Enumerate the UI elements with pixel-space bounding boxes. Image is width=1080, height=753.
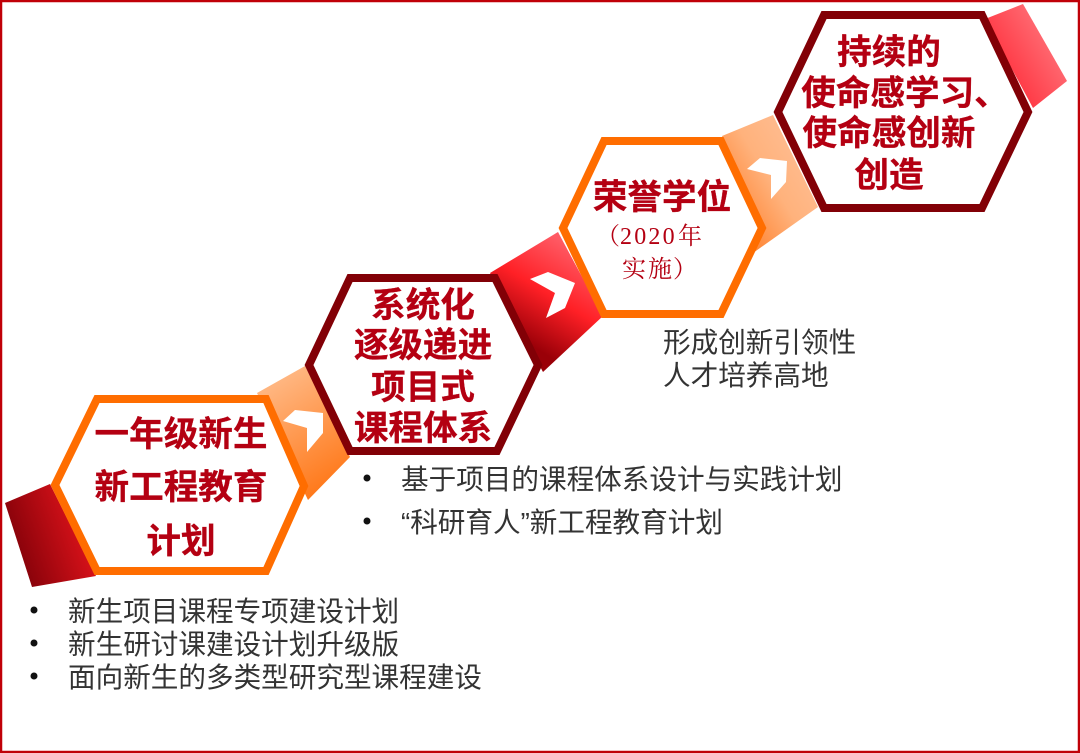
- heading: hexagon 4: 持续的: [837, 34, 941, 72]
- heading: hexagon 2: [354, 287, 492, 448]
- heading: hexagon 4: 创造: [854, 157, 924, 195]
- bullet list: step 2: “科研育人”新工程教育计划: [401, 507, 723, 538]
- hexagon 4: continuing mission learning: [778, 15, 1028, 208]
- bullet list: step 1: 新生项目课程专项建设计划: [68, 596, 399, 627]
- heading: hexagon 2: 系统化: [371, 287, 475, 325]
- subheading: hexagon 3: ）: [673, 257, 697, 283]
- heading: hexagon 2: 逐级递进: [354, 327, 492, 365]
- icon: chevron arrow 2: [530, 272, 575, 318]
- heading: hexagon 4: 使命感创新: [803, 115, 975, 153]
- heading: hexagon 4: [801, 34, 1009, 195]
- bullet list: step 2: [364, 464, 843, 538]
- icon: chevron arrow 3: [747, 158, 787, 199]
- icon: chevron arrow 1: [283, 410, 323, 452]
- ribbon: red end: [985, 4, 1067, 108]
- subheading: hexagon 3: 年: [678, 223, 702, 250]
- hexagon 1: first-year programme: [55, 399, 304, 571]
- text block: step 3 outcome: 形成创新引领性: [663, 327, 856, 358]
- heading: hexagon 2: 项目式: [371, 369, 475, 407]
- heading: hexagon 1: 计划: [146, 523, 216, 561]
- subheading: hexagon 3: 施: [648, 256, 672, 283]
- text block: step 3 outcome: [663, 327, 856, 391]
- text block: step 3 outcome: 人才培养高地: [663, 360, 829, 391]
- ribbon: orange step 1: [257, 366, 350, 500]
- heading: hexagon 4: 使命感学习、: [801, 75, 1009, 113]
- bullet list: step 1: [30, 596, 482, 693]
- hexagon 3: honours degree: [563, 141, 762, 314]
- subheading: hexagon 3: [596, 223, 702, 283]
- bullet list: step 1: 面向新生的多类型研究型课程建设: [68, 662, 482, 693]
- heading: hexagon 1: [95, 416, 267, 561]
- bullet list: step 1: 新生研讨课建设计划升级版: [68, 629, 399, 660]
- ribbon: dark red start: [5, 484, 96, 587]
- heading: hexagon 1: 一年级新生: [95, 416, 267, 454]
- heading: hexagon 1: 新工程教育: [95, 469, 267, 507]
- ribbon: orange step 3: [722, 115, 818, 253]
- bullet list: step 2: 基于项目的课程体系设计与实践计划: [401, 464, 843, 495]
- ribbon: red step 2: [490, 232, 603, 372]
- subheading: hexagon 3: （: [596, 224, 620, 250]
- hexagon 2: project curriculum: [309, 278, 538, 451]
- subheading: hexagon 3: 2020: [620, 224, 677, 250]
- heading: hexagon 3: 荣誉学位: [593, 179, 731, 217]
- subheading: hexagon 3: 实: [622, 256, 646, 283]
- heading: hexagon 2: 课程体系: [354, 410, 492, 448]
